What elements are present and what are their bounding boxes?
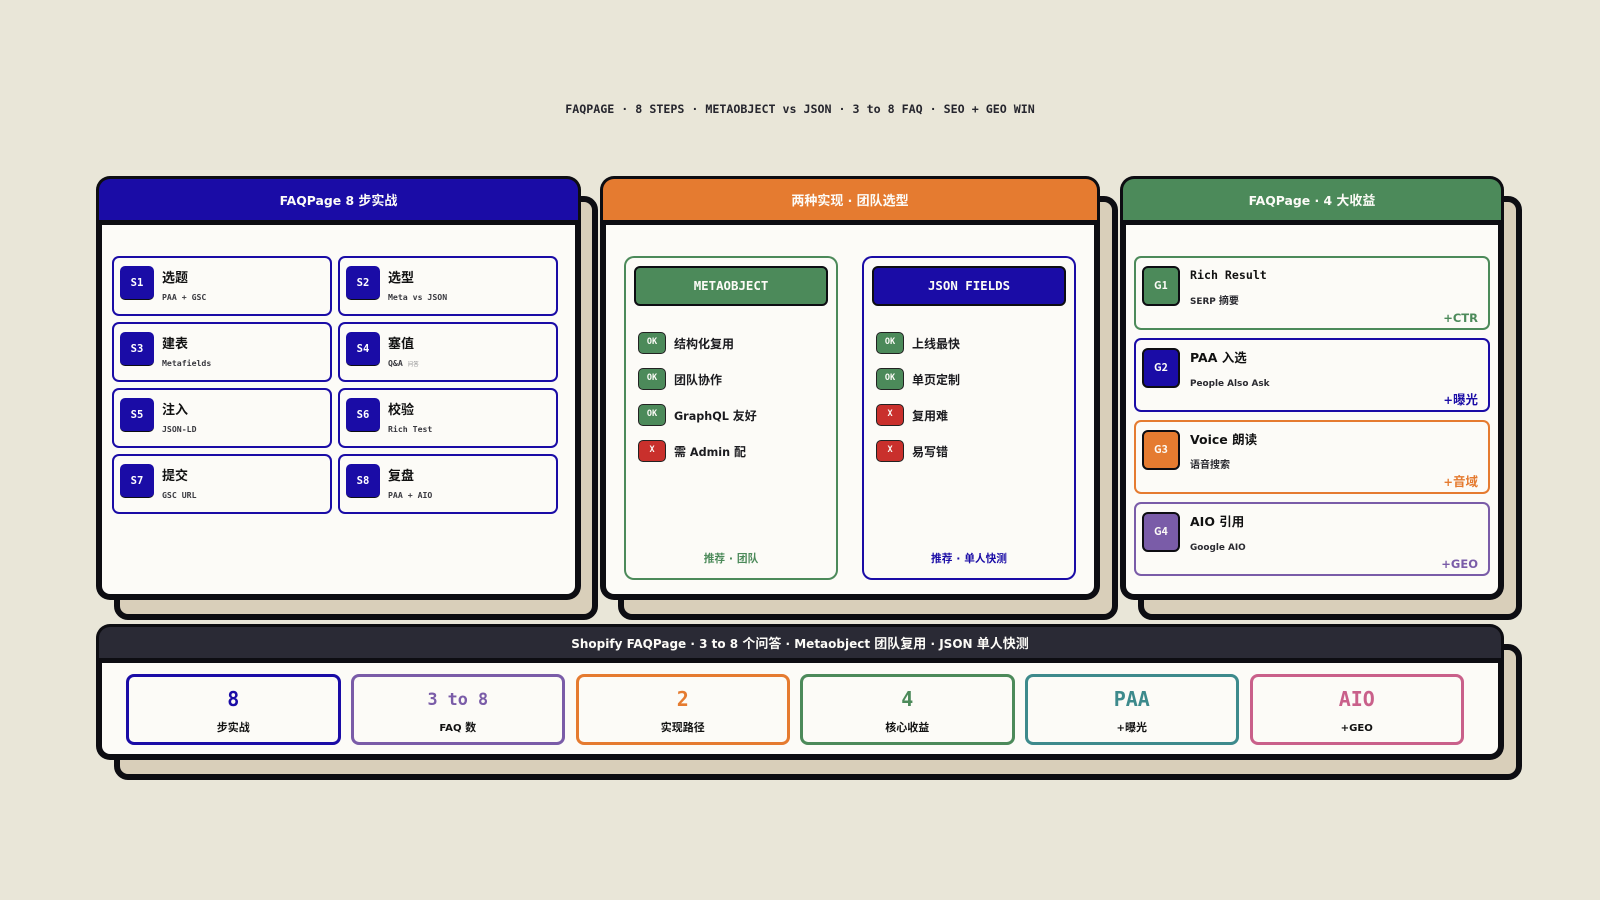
KPI: 3 to 8 FAQ: [350, 674, 565, 745]
item: GraphQL friendly: GraphQL 友好: [674, 407, 757, 424]
benefit card G2: People Also Ask: [1190, 379, 1270, 389]
step card S2: Meta vs JSON: [388, 292, 447, 302]
step card S3: Metafields: [162, 358, 211, 368]
item: GraphQL friendly: [638, 404, 757, 426]
item: fastest launch: 上线最快: [912, 335, 960, 352]
KPI: 4 benefits: [800, 674, 1014, 745]
benefit card G1: G1: [1154, 278, 1168, 293]
step card S4: [338, 322, 558, 382]
KPI: AIO: +GEO: [1341, 723, 1373, 734]
column: JSON fields: [862, 256, 1076, 580]
item: structured reuse: 结构化复用: [674, 335, 734, 352]
summary heading: Shopify FAQPage · 3 to 8 个问答 · Metaobject 团队复用 · JSON 单人快测: [571, 633, 1029, 652]
KPI: 2 paths: 实现路径: [661, 719, 705, 735]
heading: 4 benefits: FAQPage · 4 大收益: [1249, 190, 1375, 209]
recommendation: solo: 推荐 · 单人快测: [931, 551, 1007, 566]
KPI: 3 to 8 FAQ: FAQ 数: [439, 719, 476, 735]
benefit card G4: +GEO: [1441, 557, 1478, 571]
summary heading: [99, 627, 1501, 658]
benefit card G4: G4: [1154, 524, 1168, 539]
benefit card G3: G3: [1154, 442, 1168, 457]
item: per page custom: OK: [885, 373, 895, 383]
KPI: 8 steps: 8: [227, 687, 239, 711]
item: structured reuse: [638, 332, 734, 354]
benefit card G4: AIO 引用: [1190, 514, 1244, 529]
item: GraphQL friendly: OK: [647, 409, 657, 419]
benefit card G2: PAA 入选: [1190, 350, 1247, 365]
KPI: AIO: [1250, 674, 1464, 745]
step card S8: 复盘: [388, 465, 414, 484]
recommendation: team: 推荐 · 团队: [704, 551, 758, 566]
step card S7: GSC URL: [162, 490, 197, 500]
KPI: PAA: [1024, 674, 1239, 745]
step card S2: S2: [357, 277, 369, 289]
step card S8: [338, 454, 558, 514]
KPI: AIO: AIO: [1339, 687, 1375, 711]
benefit card G1: SERP 摘要: [1190, 292, 1239, 307]
benefit card G1: Rich Result: [1190, 268, 1267, 282]
heading: 4 benefits: [1123, 179, 1501, 220]
item: fastest launch: [876, 332, 960, 354]
KPI: PAA: PAA: [1114, 687, 1150, 711]
step card S6: Rich Test: [388, 424, 432, 434]
heading: two implementations: 两种实现 · 团队选型: [791, 190, 909, 209]
step card S4: S4: [357, 343, 369, 355]
step card S1: [112, 256, 332, 316]
KPI: 3 to 8 FAQ: 3 to 8: [427, 689, 488, 709]
item: hard to reuse: [876, 404, 948, 426]
column header: metaobject: METAOBJECT: [694, 278, 768, 293]
panel: FAQPage 8 steps: [96, 176, 581, 600]
heading: two implementations: [603, 179, 1097, 220]
column header: metaobject: [634, 266, 828, 306]
item: structured reuse: OK: [647, 337, 657, 347]
heading: 8 steps: [99, 179, 578, 220]
step card S6: S6: [357, 409, 369, 421]
benefit card G2: [1134, 338, 1490, 412]
benefit card G3: 语音搜索: [1190, 456, 1230, 471]
item: hard to reuse: X: [887, 409, 893, 419]
step card S4: 塞值: [388, 333, 414, 352]
panel: 4 benefits: [1120, 176, 1504, 600]
step card S8: PAA + AIO: [388, 490, 432, 500]
step card S1: S1: [131, 277, 143, 289]
step card S5: JSON-LD: [162, 424, 197, 434]
item: per page custom: [876, 368, 960, 390]
step card S3: [112, 322, 332, 382]
step card S6: [338, 388, 558, 448]
KPI: 2 paths: [576, 674, 790, 745]
item: error prone: 易写错: [912, 443, 948, 460]
step card S6: 校验: [388, 399, 414, 418]
step card S3: S3: [131, 343, 143, 355]
subtitle tagline: FAQPAGE · 8 STEPS · METAOBJECT vs JSON · 3 to 8 FAQ · SEO + GEO WIN: [565, 102, 1035, 116]
KPI: 2 paths: 2: [677, 687, 689, 711]
step card S4: Q&A 问答: [388, 358, 419, 368]
benefit card G2: +曝光: [1443, 389, 1478, 408]
item: needs admin: 需 Admin 配: [674, 443, 746, 460]
benefit card G3: Voice 朗读: [1190, 432, 1257, 447]
KPI: 8 steps: [126, 674, 340, 745]
item: error prone: [876, 440, 948, 462]
KPI: 4 benefits: 核心收益: [885, 719, 929, 735]
step card S7: [112, 454, 332, 514]
item: needs admin: X: [649, 445, 655, 455]
benefit card G4: [1134, 502, 1490, 576]
benefit card G1: [1134, 256, 1490, 330]
step card S5: [112, 388, 332, 448]
column: metaobject: [624, 256, 838, 580]
step card S1: PAA + GSC: [162, 292, 206, 302]
step card S5: S5: [131, 409, 143, 421]
benefit card G4: Google AIO: [1190, 543, 1246, 553]
item: team collaboration: OK: [647, 373, 657, 383]
step card S3: 建表: [162, 333, 188, 352]
column header: JSON fields: JSON FIELDS: [928, 278, 1010, 293]
step card S8: S8: [357, 475, 369, 487]
item: error prone: X: [887, 445, 893, 455]
item: needs admin: [638, 440, 746, 462]
panel: two implementations: [600, 176, 1100, 600]
item: hard to reuse: 复用难: [912, 407, 948, 424]
item: fastest launch: OK: [885, 337, 895, 347]
benefit card G3: [1134, 420, 1490, 494]
heading: 8 steps: FAQPage 8 步实战: [280, 190, 397, 209]
step card S5: 注入: [162, 399, 188, 418]
item: team collaboration: [638, 368, 722, 390]
item: team collaboration: 团队协作: [674, 371, 722, 388]
benefit card G2: G2: [1154, 360, 1168, 375]
benefit card G1: +CTR: [1443, 311, 1478, 325]
item: per page custom: 单页定制: [912, 371, 960, 388]
KPI: 4 benefits: 4: [901, 687, 913, 711]
step card S7: S7: [131, 475, 143, 487]
step card S1: 选题: [162, 267, 188, 286]
column header: JSON fields: [872, 266, 1066, 306]
KPI: 8 steps: 步实战: [217, 719, 250, 735]
benefit card G3: +音域: [1443, 471, 1478, 490]
step card S2: [338, 256, 558, 316]
KPI: PAA: +曝光: [1117, 719, 1147, 735]
step card S2: 选型: [388, 267, 414, 286]
panel: summary strip: [96, 624, 1504, 760]
step card S7: 提交: [162, 465, 188, 484]
